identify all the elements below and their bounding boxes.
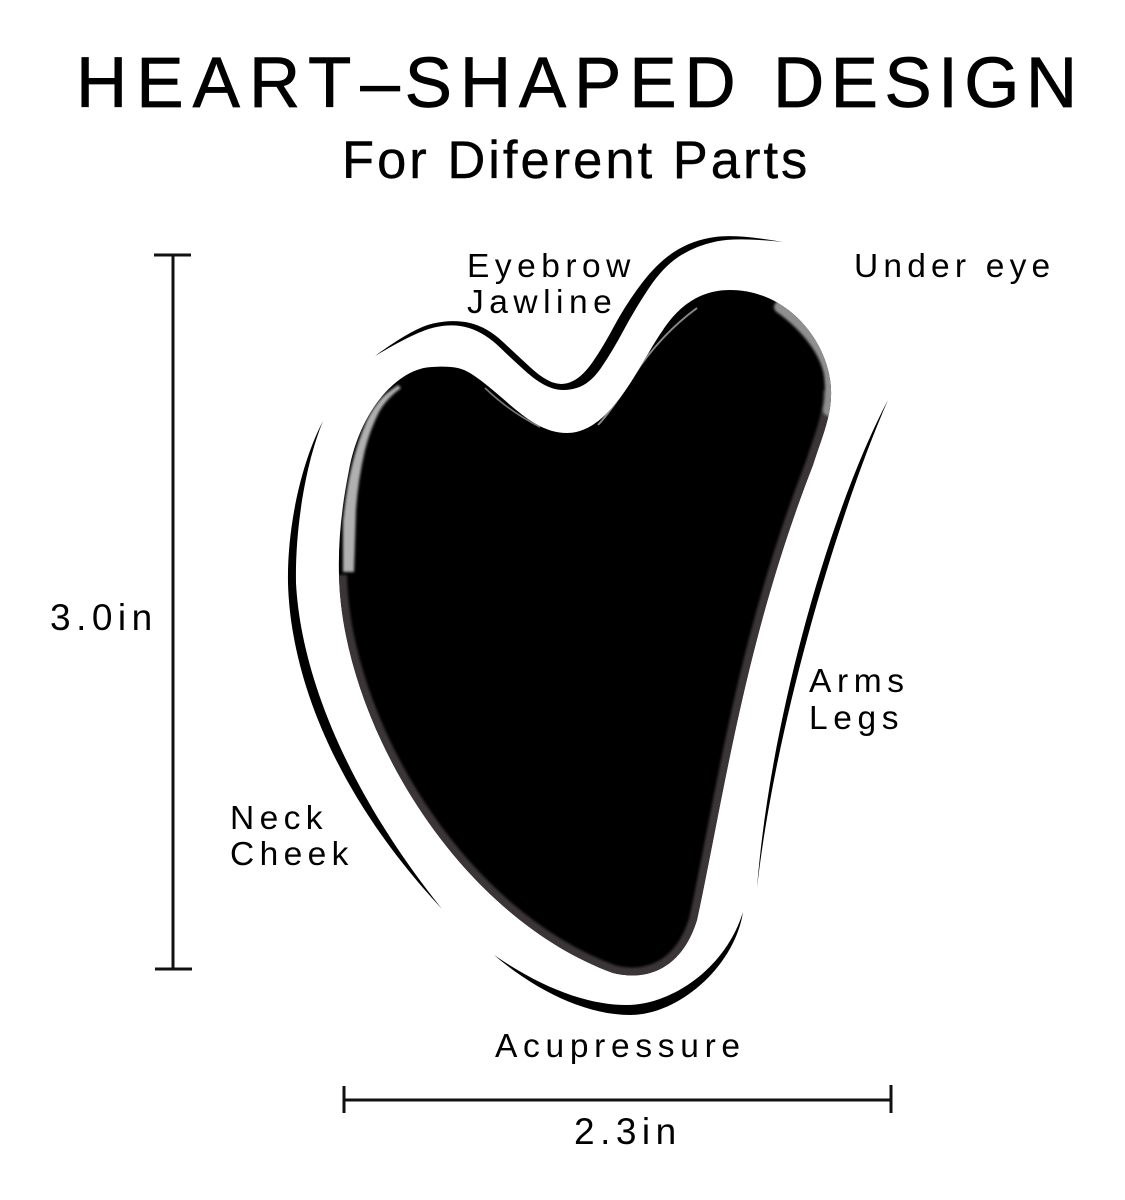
title: HEART–SHAPED DESIGN xyxy=(76,44,1084,123)
label: eyebrow jawline: Eyebrow xyxy=(467,248,636,285)
stone edge highlights xyxy=(339,307,831,975)
label: neck cheek: Neck xyxy=(230,800,328,837)
label: under eye: Under eye xyxy=(854,248,1055,285)
label: arms legs: Legs xyxy=(809,700,904,737)
width dimension line xyxy=(344,1085,891,1113)
stone body xyxy=(339,290,831,975)
contour line: acupressure xyxy=(494,912,743,1015)
label: neck cheek: Cheek xyxy=(230,836,354,873)
contour line: eyebrow and jawline xyxy=(375,236,783,390)
label: acupressure: Acupressure xyxy=(495,1028,746,1065)
label: eyebrow jawline xyxy=(467,248,636,321)
label: eyebrow jawline: Jawline xyxy=(467,284,617,321)
contour line: arms and legs xyxy=(757,400,888,888)
width label: 2.3in xyxy=(574,1111,682,1152)
label: arms legs: Arms xyxy=(809,663,910,700)
subtitle: For Diferent Parts xyxy=(342,131,810,190)
label: arms legs xyxy=(809,663,910,737)
contour line: neck and cheek xyxy=(288,421,442,909)
height label: 3.0in xyxy=(50,597,158,638)
gua sha stone xyxy=(339,290,831,975)
label: neck cheek xyxy=(230,800,354,873)
height dimension line xyxy=(154,255,192,969)
